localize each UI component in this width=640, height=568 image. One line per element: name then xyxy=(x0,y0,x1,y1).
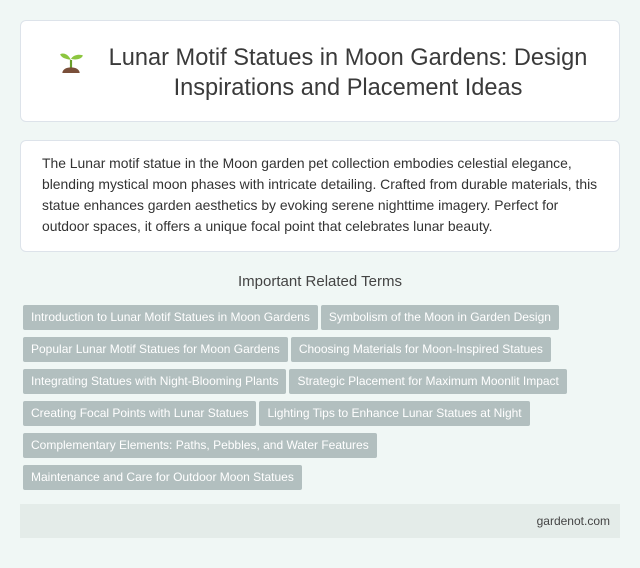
tags list: Integrating Statues with Night-Blooming Plants xyxy=(31,374,278,388)
tags list: Symbolism of the Moon in Garden Design xyxy=(329,310,551,324)
tags list: Strategic Placement for Maximum Moonlit Impact xyxy=(297,374,559,388)
tags list xyxy=(23,305,567,490)
tags list: Lighting Tips to Enhance Lunar Statues at Night xyxy=(267,406,522,420)
tags list: Creating Focal Points with Lunar Statues xyxy=(31,406,248,420)
tags list: Introduction to Lunar Motif Statues in Moon Gardens xyxy=(31,310,310,324)
tags list: Complementary Elements: Paths, Pebbles, and Water Features xyxy=(31,438,369,452)
header card xyxy=(20,20,620,122)
footer: gardenot.com xyxy=(537,514,610,528)
tags list: Popular Lunar Motif Statues for Moon Gardens xyxy=(31,342,280,356)
icon: seedling xyxy=(60,54,83,73)
footer xyxy=(20,504,620,538)
title: Lunar Motif Statues in Moon Gardens: Design Inspirations and Placement Ideas xyxy=(109,45,587,101)
description card: The Lunar motif statue in the Moon garden pet collection embodies celestial elegance, blending mystical moon phases with intricate detailing. Crafted from durable materials, this statue enhances garden aesthetics by evoking serene nighttime imagery. Perfect for outdoor spaces, it offers a unique focal point that celebrates lunar beauty. xyxy=(42,155,597,234)
tags list: Choosing Materials for Moon-Inspired Statues xyxy=(299,342,543,356)
description card xyxy=(20,140,620,252)
tags list: Maintenance and Care for Outdoor Moon Statues xyxy=(31,470,294,484)
heading: important related terms: Important Related Terms xyxy=(238,273,402,290)
